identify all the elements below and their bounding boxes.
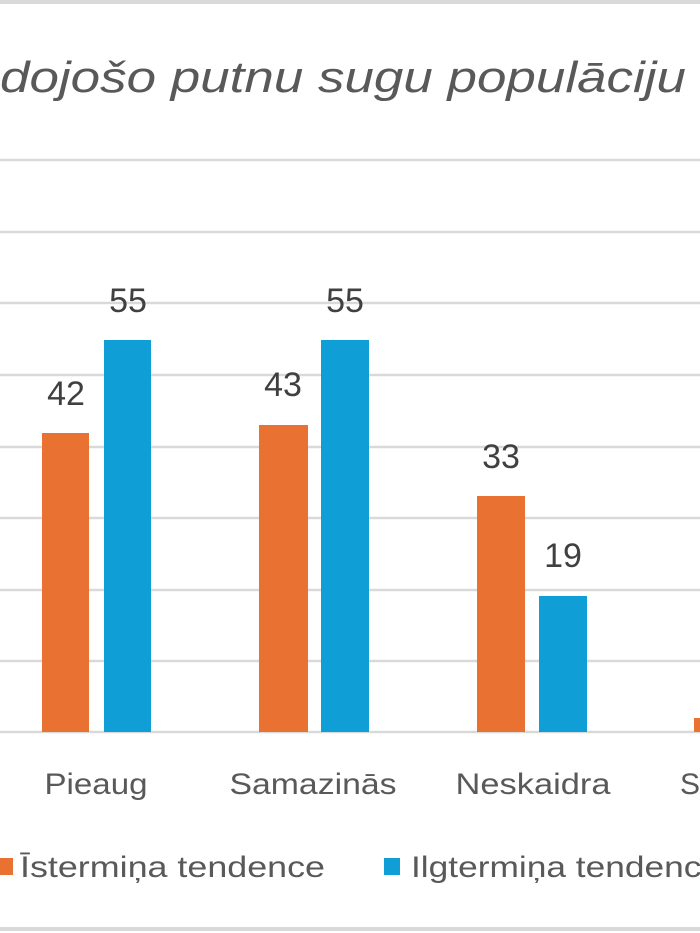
value labels: 42 [47,375,85,413]
value labels: 55 [109,282,147,320]
title: dojošo putnu sugu populāciju [0,53,686,102]
category labels: Pieaug [44,768,148,801]
value labels: 55 [326,282,364,320]
category labels: Neskaidra [456,768,611,801]
value labels: 33 [482,438,520,476]
legend: Īstermiņa tendence [20,851,325,884]
bars: Neskaidra [477,496,587,732]
legend: Ilgtermiņa tendence [411,851,700,884]
value labels [47,282,582,575]
value labels: 19 [544,537,582,575]
bar: S partial [694,718,700,732]
bars: Samazinās [259,340,369,732]
category labels: S [680,768,700,801]
legend [0,851,700,884]
category labels: Samazinās [230,768,396,801]
value labels: 43 [264,366,302,404]
bars: Pieaug [42,340,151,732]
category labels [44,768,700,801]
